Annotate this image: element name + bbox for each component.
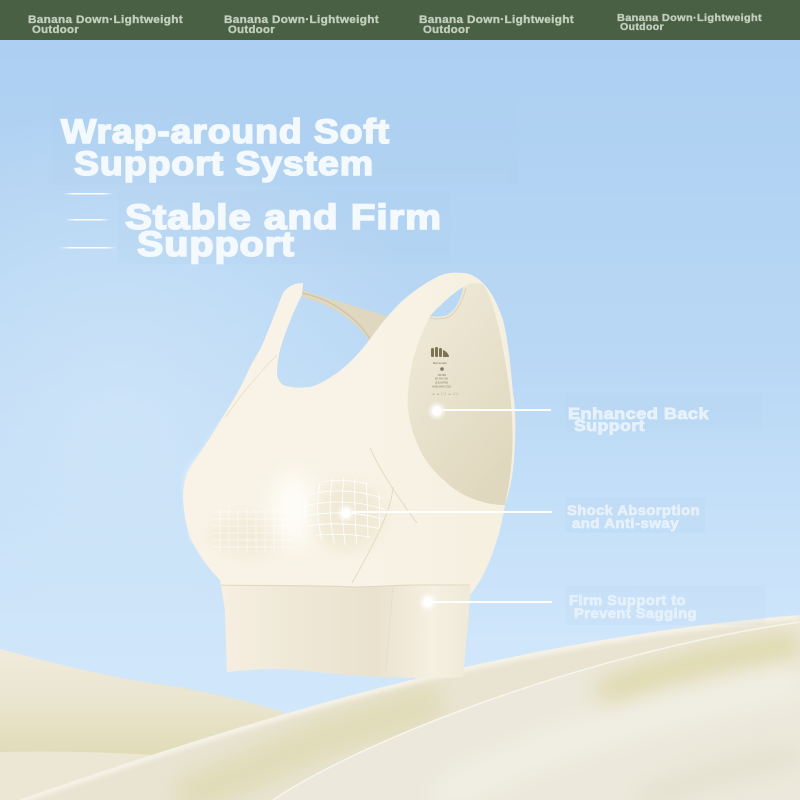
title: Wrap-around Soft: [61, 113, 390, 151]
leader line: [352, 511, 552, 513]
garment inside back: [408, 283, 513, 505]
callout text: and Anti-sway: [572, 515, 679, 531]
title: [61, 113, 390, 183]
tag text: Bananain: [433, 361, 447, 365]
ribbon crease highlight: [273, 622, 800, 800]
faint text panels: [52, 95, 765, 625]
tag text: HAND WASH COLD: [432, 384, 452, 388]
tag text: M/165: [438, 373, 446, 377]
marker dot: [427, 401, 447, 421]
mesh grid: cup: [304, 477, 385, 545]
tag text: 82 NYLON: [435, 376, 448, 380]
callout text: [567, 502, 700, 531]
header label 2: [224, 14, 379, 36]
header label 2: Banana Down·Lightweight: [224, 14, 379, 26]
leader line: [434, 601, 552, 603]
header label 3: [419, 14, 574, 36]
header label 1: [28, 14, 183, 36]
seams: [225, 355, 417, 672]
header label 3: Banana Down·Lightweight: [419, 14, 574, 26]
header label 2: Outdoor: [228, 24, 275, 36]
under band: [221, 585, 470, 678]
callout: shock absorption: [336, 502, 700, 531]
header label 1: Outdoor: [32, 24, 79, 36]
tag text: [432, 361, 459, 396]
soft halo: [183, 415, 240, 580]
header label 1: Banana Down·Lightweight: [28, 14, 183, 26]
header bar: [0, 0, 800, 40]
callout text: Enhanced Back: [568, 406, 709, 423]
hill: back left: [0, 649, 286, 757]
mesh grid: left: [213, 508, 293, 552]
cup shading: [210, 482, 385, 555]
callout text: Prevent Sagging: [574, 605, 697, 621]
back strap: [301, 290, 393, 344]
strap opening (sky): [430, 287, 463, 317]
care tag print: [431, 347, 459, 396]
ribbon: middle: [0, 600, 800, 800]
leader line: [443, 409, 551, 411]
header label 4: Banana Down·Lightweight: [617, 13, 762, 24]
neck ribbing: [430, 288, 466, 319]
callout text: Firm Support to: [569, 592, 686, 608]
subtitle: [125, 198, 442, 264]
callout: back support: [427, 401, 709, 435]
subtitle: Stable and Firm: [125, 198, 442, 237]
silk hills: [0, 600, 800, 800]
header label 4: [617, 13, 762, 33]
garment body: [183, 273, 515, 678]
decorative speed lines: [60, 193, 116, 248]
title: Support System: [74, 145, 374, 183]
subtitle: Support: [137, 225, 295, 264]
tag text: x x ☐ x ☐: [432, 392, 459, 396]
header label 3: Outdoor: [423, 24, 470, 36]
tag text: 18 ELASTANE: [435, 380, 448, 384]
marker dot: [418, 592, 438, 612]
callout: firm support: [418, 592, 697, 621]
callout text: Support: [574, 418, 645, 435]
callout text: [569, 592, 697, 621]
hill: lower left: [0, 752, 153, 800]
ribbon: front: [274, 622, 800, 800]
header label 4: Outdoor: [620, 22, 664, 33]
callout text: [568, 406, 709, 435]
marker dot: [336, 503, 356, 523]
tag logo: [431, 347, 449, 357]
garment glow: [273, 472, 313, 548]
product: white sports bra: [183, 273, 515, 678]
callout text: Shock Absorption: [567, 502, 700, 518]
